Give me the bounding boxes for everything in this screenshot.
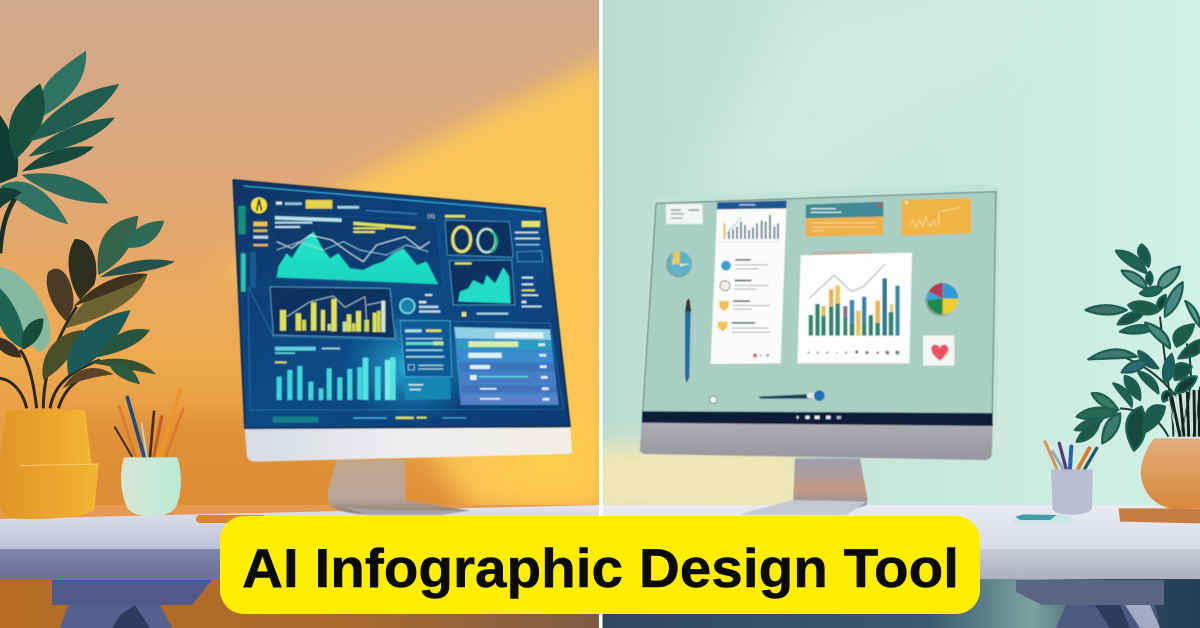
blue list table	[454, 327, 559, 405]
cyan bar chart	[275, 347, 396, 400]
heart card	[923, 335, 954, 366]
area chart panel	[273, 213, 443, 287]
sidebar	[238, 197, 268, 292]
yellow bar chart	[270, 287, 395, 338]
lower plant	[0, 216, 175, 408]
pencils	[115, 390, 183, 456]
screen glow	[340, 310, 480, 423]
terracotta pot	[1141, 438, 1200, 508]
note card	[666, 204, 703, 224]
stand and foot	[327, 460, 470, 515]
colorful pie	[925, 283, 958, 316]
top toolbar	[276, 200, 435, 220]
taskbar	[642, 411, 993, 426]
right monitor	[640, 183, 1000, 515]
chin	[245, 425, 572, 462]
rings	[445, 215, 513, 257]
upper plant	[0, 51, 119, 253]
orange chart card	[902, 198, 971, 236]
grey cup	[1051, 469, 1093, 515]
stand and foot	[740, 458, 867, 515]
center chart paper	[797, 250, 912, 363]
slider	[758, 390, 825, 401]
document panel	[711, 201, 787, 364]
top toolbar: (X)	[427, 214, 435, 220]
screen	[643, 192, 996, 413]
orange pencil on desk	[196, 515, 266, 523]
stems	[1110, 317, 1200, 437]
screen	[233, 180, 570, 428]
wooden base	[1119, 508, 1200, 523]
middle settings card	[400, 321, 452, 400]
divider line	[599, 0, 602, 628]
small area chart	[449, 260, 515, 317]
small pie	[666, 251, 692, 277]
right stats column	[515, 221, 543, 307]
panel: cool right wall	[590, 0, 1200, 628]
chin	[640, 422, 993, 460]
right plant, cup and pot	[1013, 244, 1200, 526]
title text: AI Infographic Design Tool	[242, 537, 959, 599]
pen cup contents	[1045, 442, 1097, 468]
top light line	[243, 186, 542, 212]
round button	[710, 396, 717, 403]
yellow pot	[0, 410, 99, 519]
desk right	[602, 505, 1200, 628]
monitor halo	[640, 183, 1000, 423]
pencil cup	[121, 457, 181, 516]
leaves	[1075, 244, 1200, 451]
notebook	[1013, 514, 1074, 526]
bottom status bar	[273, 417, 466, 423]
title badge	[220, 516, 980, 614]
desk left	[0, 505, 599, 628]
panel: warm left wall	[0, 0, 610, 628]
blue pen	[685, 298, 691, 383]
donut stat	[400, 294, 440, 313]
striped stems	[1172, 390, 1199, 437]
left plant and pencil cup	[0, 51, 183, 519]
teal and orange card	[806, 202, 883, 237]
main frame outline	[248, 287, 563, 410]
left monitor	[233, 180, 572, 515]
